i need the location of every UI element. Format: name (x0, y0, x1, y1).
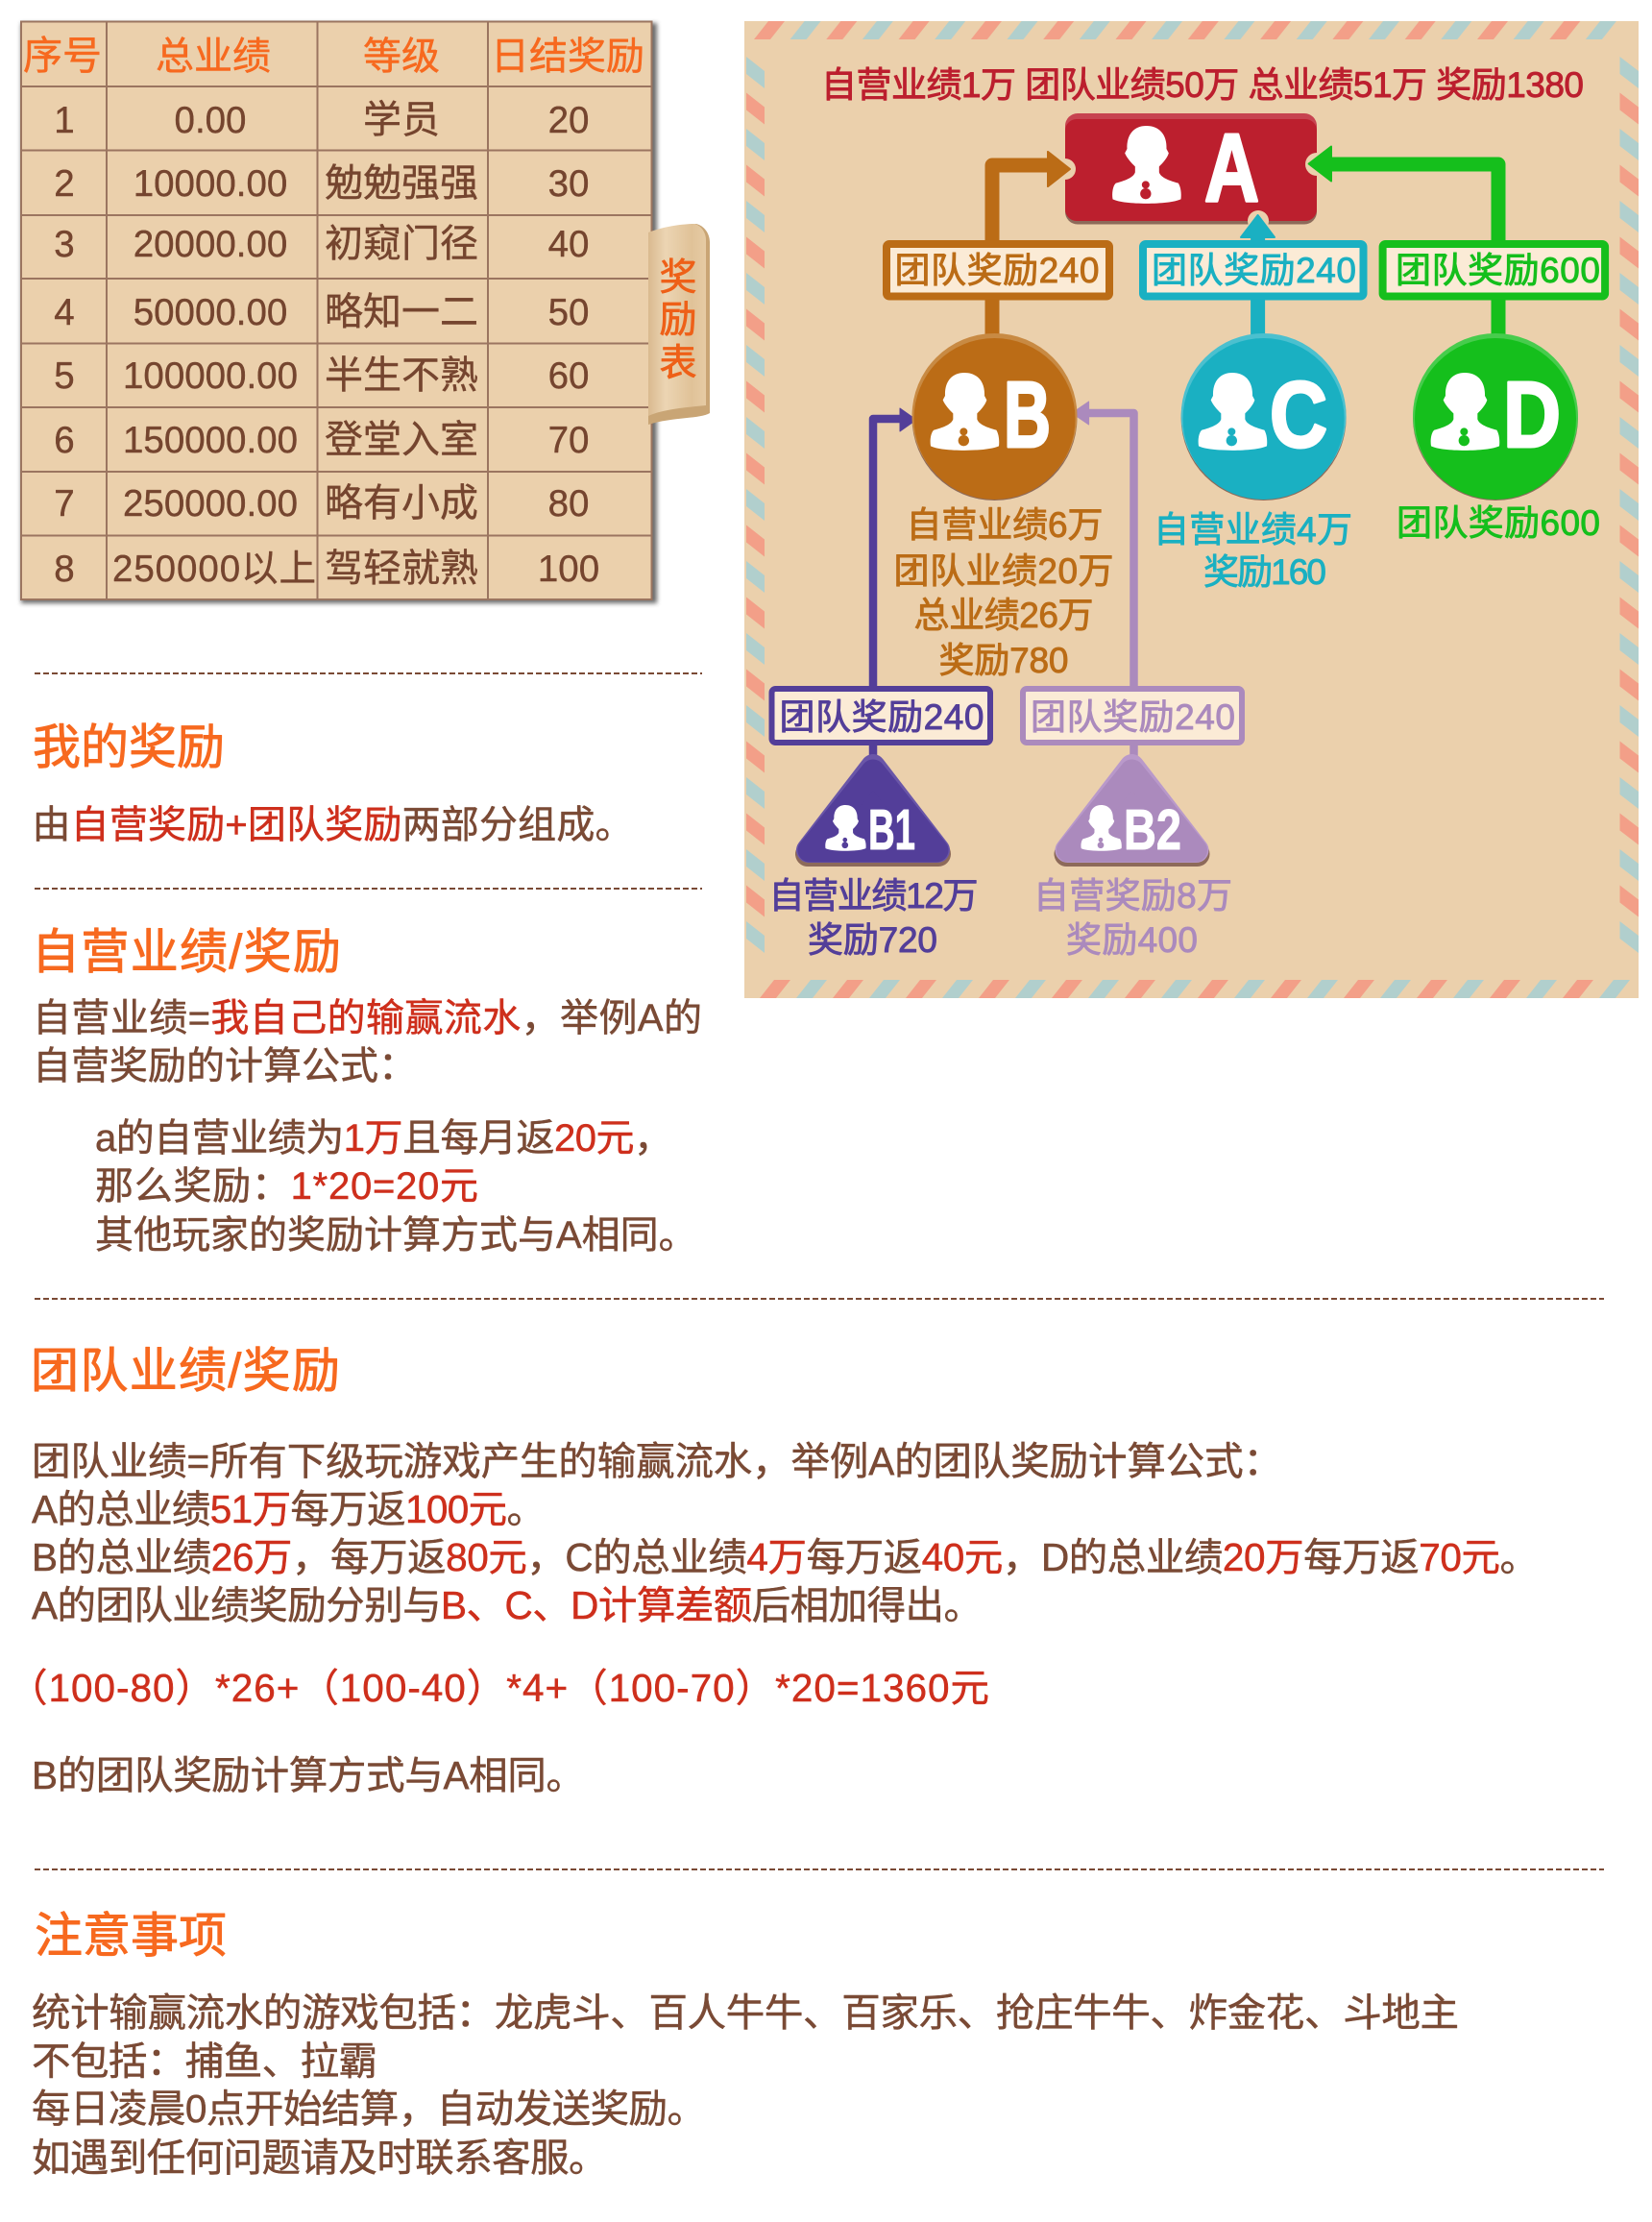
node B2 (1066, 767, 1197, 862)
node B1 (808, 767, 938, 862)
table rows: 7 (54, 483, 75, 525)
text: team explanation (32, 1439, 1539, 1627)
panel: team hierarchy diagram (744, 21, 1639, 998)
text: B2 stats: 奖励400 (1066, 920, 1198, 960)
text: reward composition: 由自营奖励+团队奖励两部分组成。 (33, 804, 634, 846)
text: C stats: 奖励160 (1203, 552, 1326, 592)
text: B stats: 自营业绩6万 (907, 505, 1103, 545)
node D (1413, 333, 1578, 501)
heading: 我的奖励: 我的奖励 (33, 720, 225, 774)
text: self-run explanation: 自营奖励的计算公式： (33, 1045, 417, 1087)
side tab: 奖励表 (648, 224, 710, 425)
text: notes (32, 1990, 1459, 2180)
text: C stats: 自营业绩4万 (1154, 510, 1352, 549)
label: B2 team reward: 团队奖励240 (1031, 697, 1235, 737)
table rows: 4 (54, 292, 75, 333)
table rows: 50000.00 (134, 292, 287, 333)
table rows: 初窥门径 (325, 223, 478, 265)
text: B stats: 总业绩26万 (914, 596, 1093, 635)
icon: person A (1112, 126, 1181, 204)
table rows: 2 (54, 163, 75, 205)
text: team formula: （100-80）*26+（100-40）*4+（100-70）*20=1360元 (9, 1666, 989, 1710)
table rows: 70 (548, 420, 589, 461)
text: B stats: 团队业绩20万 (893, 551, 1114, 591)
side tab: 奖励表: 奖 (659, 257, 697, 299)
text: team explanation: B的总业绩26万，每万返80元，C的总业绩4万每万返40元，D的总业绩20万每万返70元。 (32, 1535, 1539, 1579)
table rows: 学员 (363, 99, 440, 141)
node B1: B1 (868, 798, 915, 862)
icon: person B1 (825, 805, 866, 851)
text: notes: 如遇到任何问题请及时联系客服。 (32, 2136, 607, 2180)
label: D team reward (1383, 244, 1605, 296)
node B: B (1004, 362, 1051, 467)
table rows: 60 (548, 355, 589, 397)
arrow: B1 to B (873, 408, 916, 769)
table rows: 100000.00 (123, 355, 298, 397)
label: D team reward: 团队奖励600 (1396, 251, 1600, 290)
table shadow (21, 23, 657, 603)
table rows: 略有小成 (325, 482, 478, 525)
node A (1055, 113, 1328, 232)
label: B1 team reward (772, 689, 990, 743)
table rows: 50 (548, 292, 589, 333)
table rows: 250000以上 (112, 549, 316, 590)
text: B stats (893, 505, 1114, 680)
table header: 等级 (363, 36, 440, 78)
table rows: 1 (54, 100, 75, 141)
text: self-run example: a的自营业绩为1万且每月返20元， (95, 1117, 672, 1160)
table rows: 登堂入室 (325, 419, 478, 461)
table rows: 半生不熟 (325, 354, 478, 397)
node A: A (1204, 114, 1259, 222)
node B (912, 333, 1078, 501)
table rows: 20 (548, 100, 589, 141)
text: notes: 不包括：捕鱼、拉霸 (32, 2039, 377, 2083)
icon: person C (1199, 373, 1267, 451)
table rows: 20000.00 (134, 224, 287, 265)
diagram title: 自营业绩1万 团队业绩50万 总业绩51万 奖励1380 (821, 65, 1584, 105)
table rows: 5 (54, 355, 75, 397)
arrow: B2 to B (1072, 402, 1133, 769)
arrow: C to A (1251, 231, 1265, 346)
node B2: B2 (1124, 798, 1181, 862)
table rows: 10000.00 (134, 163, 287, 205)
heading: 注意事项: 注意事项 (35, 1909, 227, 1963)
label: B team reward: 团队奖励240 (895, 251, 1099, 290)
table rows: 40 (548, 224, 589, 265)
table header: 序号 (23, 34, 102, 78)
text: C stats (1154, 510, 1352, 592)
text: notes: 每日凌晨0点开始结算，自动发送奖励。 (32, 2087, 706, 2131)
text: team explanation: A的总业绩51万每万返100元。 (32, 1487, 546, 1531)
text: B2 stats: 自营奖励8万 (1033, 876, 1232, 916)
label: B2 team reward (1023, 689, 1242, 743)
table rows: 30 (548, 163, 589, 205)
table rows: 80 (548, 483, 589, 525)
arrow: B to A (992, 152, 1070, 346)
text: notes: 统计输赢流水的游戏包括：龙虎斗、百人牛牛、百家乐、抢庄牛牛、炸金花、斗地主 (32, 1990, 1459, 2035)
table header: 日结奖励 (491, 36, 644, 78)
text: self-run explanation: 自营业绩=我自己的输赢流水，举例A的 (33, 997, 702, 1039)
table rows: 3 (54, 224, 75, 265)
icon: person B (931, 373, 999, 451)
text: B1 stats: 自营业绩12万 (768, 876, 978, 916)
label: C team reward (1143, 244, 1364, 296)
arrow heads into A (1048, 146, 1331, 237)
text: team explanation: 团队业绩=所有下级玩游戏产生的输赢流水，举例A的团队奖励计算公式： (32, 1439, 1282, 1483)
heading: 团队业绩/奖励: 团队业绩/奖励 (31, 1344, 340, 1398)
text: D stats: 团队奖励600 (1397, 503, 1600, 543)
text: self-run explanation (33, 997, 702, 1087)
node C: C (1270, 362, 1327, 467)
text: B stats: 奖励780 (939, 641, 1068, 680)
table rows: 250000.00 (123, 483, 298, 525)
node D: D (1503, 362, 1561, 467)
side tab: 奖励表: 励 (659, 300, 697, 341)
table rows: 略知一二 (325, 291, 478, 333)
text: B1 stats (768, 876, 978, 960)
node C (1181, 333, 1347, 501)
icon: person B2 (1081, 805, 1122, 851)
table rows: 8 (54, 549, 75, 590)
table header: 总业绩 (156, 36, 271, 78)
label: C team reward: 团队奖励240 (1152, 251, 1356, 290)
table rows: 150000.00 (123, 420, 298, 461)
text: B2 stats (1033, 876, 1232, 960)
label: B1 team reward: 团队奖励240 (780, 697, 984, 737)
table rows: 勉勉强强 (325, 162, 478, 205)
text: self-run example (95, 1117, 697, 1257)
table rows: 6 (54, 420, 75, 461)
table rows: 0.00 (175, 100, 246, 141)
icon: person D (1431, 373, 1499, 451)
text: B1 stats: 奖励720 (808, 920, 937, 960)
text: B note: B的团队奖励计算方式与A相同。 (32, 1753, 585, 1797)
reward table (21, 21, 651, 599)
text: self-run example: 其他玩家的奖励计算方式与A相同。 (95, 1214, 697, 1257)
heading: 自营业绩/奖励: 自营业绩/奖励 (32, 925, 341, 979)
arrow: D to A (1325, 164, 1498, 346)
text: team explanation: A的团队业绩奖励分别与B、C、D计算差额后相加得出。 (32, 1583, 983, 1627)
label: B team reward (887, 244, 1109, 296)
table rows (54, 99, 599, 590)
side tab: 奖励表: 表 (659, 343, 697, 384)
table rows: 100 (538, 549, 599, 590)
table rows: 驾轻就熟 (325, 548, 478, 590)
text: self-run example: 那么奖励：1*20=20元 (95, 1165, 478, 1208)
table header (23, 34, 644, 78)
